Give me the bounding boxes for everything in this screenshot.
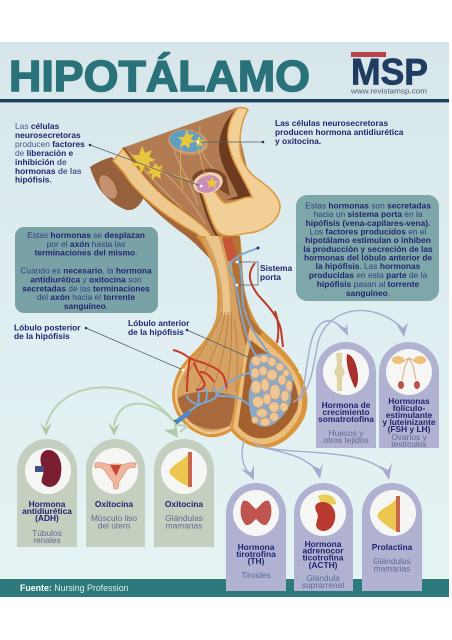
label: lóbulo posterior: de la hipófisis <box>14 331 70 341</box>
panel: portal system text: hipófisis (vena-capilares-vena). <box>306 218 430 228</box>
panel: axon text: antidiurética y oxitocina son <box>30 274 142 284</box>
text: right top label: producen hormona antidiurética <box>275 127 404 137</box>
header rule <box>0 99 449 102</box>
green arrows to posterior lobe targets <box>40 387 187 438</box>
card: ACTH: Glándula <box>306 573 340 583</box>
title: HIPOTÁLAMO <box>9 51 310 101</box>
card: TH: (TH) <box>248 556 265 566</box>
panel: portal system text: hormonas del lóbulo anterior de <box>304 252 432 262</box>
icon: uterus <box>95 463 136 489</box>
left lobe tan rim <box>176 362 230 433</box>
red artery network <box>173 350 227 392</box>
panel: axon text: Estas hormonas se desplazan <box>27 230 145 240</box>
card: FSH y LH: Ovarios y <box>391 432 427 442</box>
card: FSH y LH: Hormonas <box>388 396 430 406</box>
stalk brown right <box>222 236 262 352</box>
cell cluster <box>249 353 293 427</box>
card: TH: Hormona <box>238 542 275 552</box>
portal vein tip <box>256 246 260 250</box>
panel: axon text: sanguíneo. <box>64 301 108 311</box>
card: FSH y LH <box>379 342 439 449</box>
icon: breast <box>377 497 400 532</box>
label: sistema porta: porta <box>260 272 281 282</box>
card: ACTH: ticotrofina <box>303 552 344 562</box>
card: TH <box>226 483 286 591</box>
right lobe tan ring <box>233 326 302 444</box>
purple arrows to anterior lobe targets <box>241 310 408 480</box>
card: somatotrofina: somatrotofina <box>318 414 374 424</box>
card: ACTH: Hormona <box>305 539 342 549</box>
card: somatotrofina: crecimiento <box>322 407 370 417</box>
icon: breast <box>169 452 192 487</box>
icon: thyroid <box>241 501 271 525</box>
footer bar <box>0 579 449 597</box>
panel: portal system text: producidas en esta parte de la <box>309 270 427 280</box>
panel: axon text: por el axón hasta las <box>47 239 125 249</box>
icon: adrenal and kidney <box>318 494 336 506</box>
card: prolactina: mamarias <box>374 564 410 574</box>
card: ADH: Hormona <box>29 499 66 509</box>
brown band below ribbon <box>113 165 224 258</box>
text: left top label: hormonas de las <box>15 166 82 176</box>
card: prolactina: Glándulas <box>373 556 411 566</box>
stalk light center <box>205 236 230 315</box>
label: lóbulo anterior: Lóbulo anterior <box>128 318 190 328</box>
card: ACTH: adrenocor <box>303 546 344 556</box>
text: left top label: neurosecretoras <box>15 130 81 140</box>
text: left top label: de liberación e <box>15 148 73 158</box>
right lobe inner <box>238 340 298 438</box>
text: right top label: Las células neurosecretoras <box>275 118 388 128</box>
card: FSH y LH: y luteinizante <box>382 417 436 427</box>
label: lóbulo anterior: de la hipófisis <box>128 327 184 337</box>
card: prolactina: Prolactina <box>372 542 413 552</box>
panel: portal system text: la hipófisis. Las hormonas <box>316 261 420 271</box>
label: sistema porta: Sistema <box>260 263 292 273</box>
white anchor dots <box>182 141 301 373</box>
icon: kidney <box>40 450 61 487</box>
card: oxitocina mama: Oxitocina <box>165 499 203 509</box>
card: ACTH <box>294 483 353 591</box>
panel: portal system text: la producción y secreción de las <box>303 244 433 254</box>
card: FSH y LH: estimulante <box>386 410 433 420</box>
text: left top label: producen factores <box>15 139 85 149</box>
panel: axon text: terminaciones del mismo. <box>35 248 137 258</box>
panel: portal system text: Los factores producidos en el <box>310 226 426 236</box>
stalk red blob <box>222 238 237 262</box>
lower left lobe dark <box>178 392 235 429</box>
card: oxitocina útero <box>86 439 145 547</box>
leader lines <box>86 142 263 370</box>
left tan ribbon <box>113 149 214 250</box>
halo above pink nucleus <box>192 169 230 196</box>
text: right top label: y oxitocina. <box>275 136 321 146</box>
card: ADH: Túbulos <box>32 528 62 538</box>
portal artery <box>250 263 283 347</box>
card: somatotrofina: otros tejidos <box>323 435 369 445</box>
upper edge of ribbon shadow <box>123 148 212 238</box>
hypothalamus wedge <box>122 107 254 240</box>
card: oxitocina útero: Músculo liso <box>91 513 137 523</box>
label: lóbulo posterior: Lóbulo posterior <box>14 322 81 332</box>
card: FSH y LH: testículos <box>391 439 427 449</box>
card: FSH y LH: (FSH y LH) <box>388 424 431 434</box>
card: oxitocina útero: Oxitocina <box>95 499 133 509</box>
card: somatotrofina: Hormona de <box>322 400 371 410</box>
card: ACTH: (ACTH) <box>309 560 338 570</box>
card: FSH y LH: folículo- <box>393 403 425 413</box>
icon: bone and muscle <box>334 353 345 391</box>
portal vein <box>230 248 273 360</box>
anatomy: hypothalamus and pituitary <box>85 107 307 448</box>
card: somatotrofina: Huesos y <box>329 428 364 438</box>
panel: portal system text: hipófisis pasan al torrente <box>317 279 419 289</box>
card: ADH: antidiurética <box>22 506 72 516</box>
dark edge beside tongue <box>200 192 217 236</box>
card: TH: tirotrofina <box>236 549 276 559</box>
logo: MSP: www.revistamsp.com <box>350 86 427 96</box>
panel: portal system text: sanguíneo. <box>346 288 390 298</box>
panel: portal system text: hipotálamo estimulan o inhiben <box>305 235 431 245</box>
card: ADH: (ADH) <box>35 513 59 523</box>
dark band <box>219 108 252 200</box>
left lobe and stalk fill <box>175 238 250 434</box>
wedge swirl strokes <box>130 126 216 232</box>
icon: reproductive glands <box>392 356 426 389</box>
card: TH: Tiroides <box>241 570 271 580</box>
card: oxitocina útero: del útero <box>98 520 131 530</box>
tan region of hypothalamus <box>202 108 280 236</box>
leader dots <box>85 141 264 331</box>
panel: portal system text <box>296 195 439 301</box>
fan stripes <box>184 312 237 392</box>
footer source: Fuente: Nursing Profession <box>20 583 129 593</box>
text: left top label: hipófisis. <box>15 174 52 184</box>
card: prolactina <box>362 483 422 591</box>
card: oxitocina mama: Glándulas <box>165 513 203 523</box>
stalk and lobes silhouette <box>172 236 307 448</box>
panel: axon text: Cuando es necesario, la hormona <box>20 266 152 276</box>
text: left top label: Las células <box>15 121 59 131</box>
card: oxitocina mama: mamarias <box>166 520 202 530</box>
left bulb <box>90 157 144 210</box>
panel: axon text: del axón hacia el torrente <box>37 292 135 302</box>
logo: MSP: MSP <box>351 52 428 92</box>
panel: portal system text: hacia un sistema porta en la <box>314 209 422 219</box>
blue vein network <box>175 372 253 422</box>
card: somatotrofina <box>316 342 376 448</box>
panel: axon text <box>15 227 158 313</box>
panel: axon text: secretadas de las terminaciones <box>22 284 150 294</box>
text: left top label: inhibición de <box>15 157 67 167</box>
card: ADH <box>17 439 77 547</box>
card: ADH: renales <box>33 535 61 545</box>
card: oxitocina mama <box>154 439 214 547</box>
card: ACTH: suprarrenal <box>302 580 344 590</box>
neuron fibres <box>155 144 206 190</box>
pink nucleus <box>191 169 225 197</box>
blue nucleus <box>166 126 210 158</box>
panel: portal system text: Estas hormonas son secretadas <box>305 200 431 210</box>
neuron stars <box>131 130 218 188</box>
